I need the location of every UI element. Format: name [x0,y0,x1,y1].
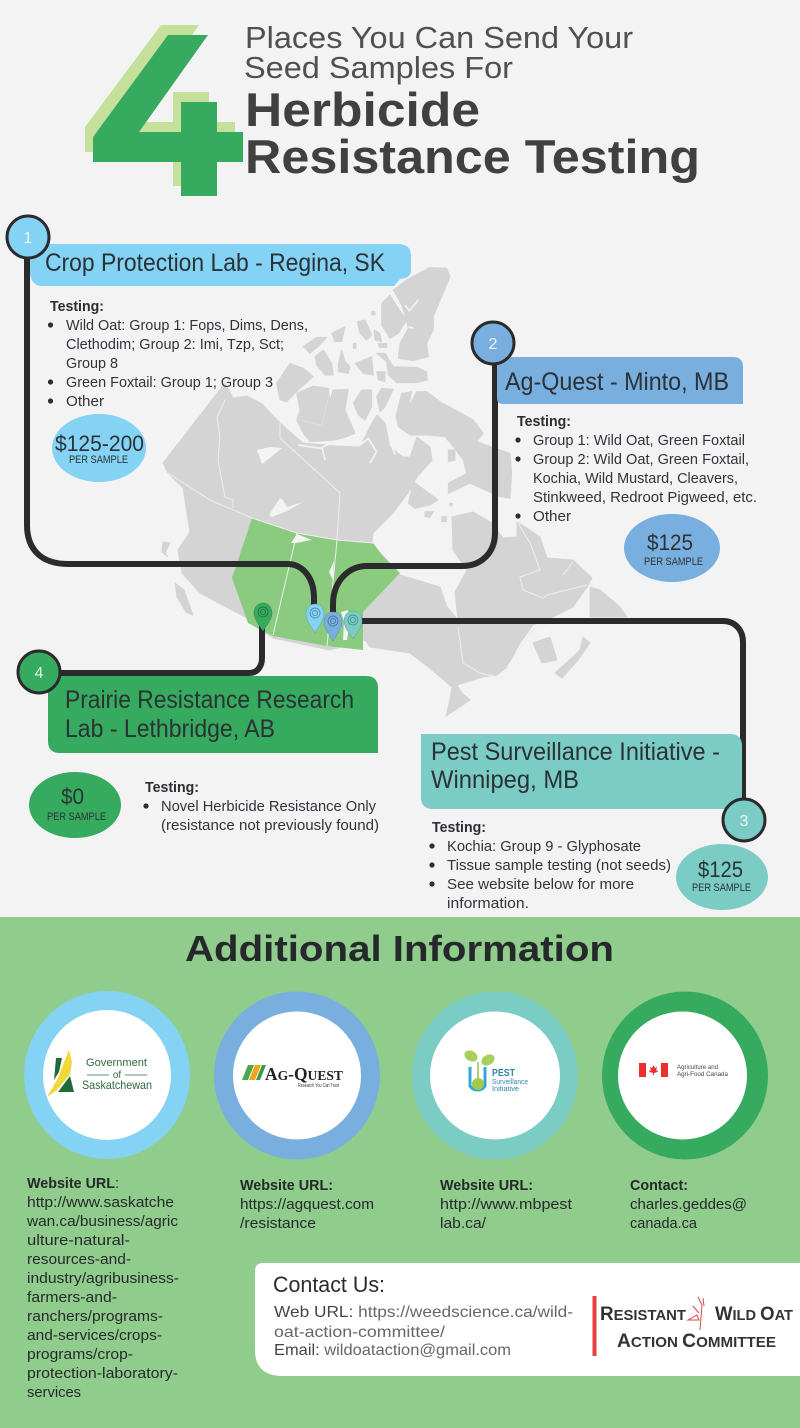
title: Herbicide [245,83,480,136]
number badge 3 [723,799,765,841]
contact text: AAFC [630,1177,747,1232]
lab name: Lab - Lethbridge, AB [65,715,275,743]
website text: Saskatchewan: resources-and- [27,1251,131,1268]
price badge: $125-200 [55,431,144,456]
website text: Saskatchewan: Website URL: [27,1175,119,1192]
testing list [48,298,308,410]
logo ring: Agriculture and Agri-Food Canada: Agriculture and [677,1064,718,1071]
connector line 2 [333,362,495,612]
title: Places You Can Send Your [245,20,633,55]
website text: Saskatchewan: industry/agribusiness- [27,1270,179,1287]
logo ring: Ag-Quest: AG-QUEST [265,1064,344,1084]
number badge 2 [472,322,514,364]
price badge: PER SAMPLE [692,882,751,894]
website text: Saskatchewan [26,1175,179,1401]
number badge 4: 4 [35,665,44,682]
contact text: AAFC: Contact: [630,1177,688,1194]
website text: Pest Surveillance: lab.ca/ [440,1215,487,1232]
lab heading bar [421,734,742,809]
lab name [431,738,720,794]
map: borders and lakes [168,400,587,677]
testing list: information. [447,895,529,912]
price badge: $125 [647,530,693,555]
contact details [274,1304,573,1359]
testing list: Other [66,393,104,410]
price badge: $125 [698,857,743,882]
website text: Saskatchewan: ulture-natural- [27,1232,130,1249]
number badge 2: 2 [489,336,498,353]
logo ring: Agriculture and Agri-Food Canada [602,992,768,1160]
testing list: Group 8 [66,355,118,372]
committee logo: WILD OAT [715,1304,793,1325]
connector line 3 [360,621,743,800]
website text: Saskatchewan: services [27,1384,81,1401]
number badge 1 [7,216,49,258]
connector line 1 [27,255,314,606]
price badge: $0 [61,784,84,809]
testing list: Tissue sample testing (not seeds) [447,857,671,874]
website text: Saskatchewan: and-services/crops- [27,1327,162,1344]
map pin: Winnipeg [344,611,362,639]
logo ring: Government of Saskatchewan: Government [86,1057,147,1069]
testing list: See website below for more [447,876,634,893]
map pin: Lethbridge [254,603,272,631]
map: arctic channels [297,300,418,463]
logo ring: Government of Saskatchewan: of [113,1070,121,1081]
map pin: Regina [306,604,324,633]
number badge 3: 3 [740,813,749,830]
lab name: Ag-Quest - Minto, MB [505,368,729,396]
map of Canada [162,267,627,716]
lab heading bar [497,357,743,404]
contact details: Email: wildoataction@gmail.com [274,1342,511,1359]
website text: Ag-Quest [240,1177,374,1232]
number badge 4 [18,651,60,693]
committee logo: RESISTANT [600,1304,686,1325]
lab name [65,686,354,743]
website text: Ag-Quest: Website URL: [240,1177,333,1194]
testing list [515,413,757,525]
title: Seed Samples For [244,50,513,85]
website text: Saskatchewan: ranchers/programs- [27,1308,163,1325]
price badge: PER SAMPLE [644,556,703,568]
logo ring: Ag-Quest: Research You Can Trust [298,1083,339,1089]
logo ring: Ag-Quest [214,992,380,1160]
testing list: Kochia, Wild Mustard, Cleavers, [533,470,738,487]
website text: Saskatchewan: protection-laboratory- [27,1365,178,1382]
logo ring: Government of Saskatchewan [24,991,190,1159]
website text: Ag-Quest: /resistance [240,1215,316,1232]
testing list [143,779,379,834]
website text: Saskatchewan: farmers-and- [27,1289,117,1306]
price badge [624,514,720,582]
contact details: Web URL: https://weedscience.ca/wild- [274,1304,573,1321]
number badge 1: 1 [24,230,33,247]
website text: Saskatchewan: wan.ca/business/agric [26,1213,179,1230]
testing list: Other [533,508,571,525]
website text: Pest Surveillance: http://www.mbpest [440,1196,573,1213]
price badge [52,414,146,482]
contact text: AAFC: canada.ca [630,1215,698,1232]
website text: Ag-Quest: https://agquest.com [240,1196,374,1213]
map: arctic islands [277,267,512,522]
panel: Prairie Resistance Research Lab [29,676,379,838]
logo ring: Pest Surveillance Initiative: PEST [492,1068,515,1079]
icon: big number 4 [85,25,243,196]
testing list: Testing: [50,298,104,315]
website text: Pest Surveillance [440,1177,573,1232]
panel: contact us [255,1263,800,1376]
website text: Saskatchewan: programs/crop- [27,1346,133,1363]
contact heading: Contact Us: [273,1272,385,1297]
lab name: Winnipeg, MB [431,766,579,794]
price badge: PER SAMPLE [47,811,106,823]
website text: Pest Surveillance: Website URL: [440,1177,533,1194]
logo ring: Pest Surveillance Initiative: Surveillance [492,1079,528,1086]
price badge [29,772,121,838]
lab heading bar [48,676,378,753]
testing list: Testing: [517,413,571,430]
testing list: Group 2: Wild Oat, Green Foxtail, [533,451,749,468]
panel: Pest Surveillance Initiative [421,734,768,912]
testing list: Wild Oat: Group 1: Fops, Dims, Dens, [66,317,308,334]
website text: Saskatchewan: http://www.saskatche [27,1194,174,1211]
testing list: Testing: [145,779,199,796]
map: west coast and maritime islands [162,542,627,678]
lab name: Crop Protection Lab - Regina, SK [45,249,385,277]
panel: Ag-Quest [497,357,757,582]
connector line 4 [50,625,262,673]
logo ring: Agriculture and Agri-Food Canada: Agri-Food Canada [677,1071,728,1078]
logo ring: Pest Surveillance Initiative: Initiative [492,1086,519,1093]
committee logo: ACTION COMMITTEE [617,1331,776,1352]
logo ring: Pest Surveillance Initiative [412,992,578,1160]
testing list: Novel Herbicide Resistance Only [161,798,376,815]
panel: additional information [0,917,800,1428]
testing list: Green Foxtail: Group 1; Group 3 [66,374,273,391]
lab name: Prairie Resistance Research [65,686,354,714]
testing list: (resistance not previously found) [161,817,379,834]
title: Resistance Testing [245,130,700,183]
title [244,20,700,183]
testing list: Clethodim; Group 2: Imi, Tzp, Sct; [66,336,284,353]
testing list: Testing: [432,819,486,836]
lab heading bar [30,244,411,286]
contact details: oat-action-committee/ [274,1324,446,1341]
contact text: AAFC: charles.geddes@ [630,1196,747,1213]
price badge: PER SAMPLE [69,454,128,466]
testing list: Group 1: Wild Oat, Green Foxtail [533,432,745,449]
testing list: Kochia: Group 9 - Glyphosate [447,838,641,855]
logo ring: Government of Saskatchewan: Saskatchewan [82,1078,152,1092]
price badge [676,844,768,910]
panel: Crop Protection Lab [30,244,411,482]
lab name: Pest Surveillance Initiative - [431,738,720,766]
committee logo [592,1296,793,1356]
map pin: Minto [324,612,342,641]
testing list [429,819,671,912]
map: prairie provinces highlighted [232,518,400,650]
testing list: Stinkweed, Redroot Pigweed, etc. [533,489,757,506]
section heading: Additional Information [185,928,614,969]
